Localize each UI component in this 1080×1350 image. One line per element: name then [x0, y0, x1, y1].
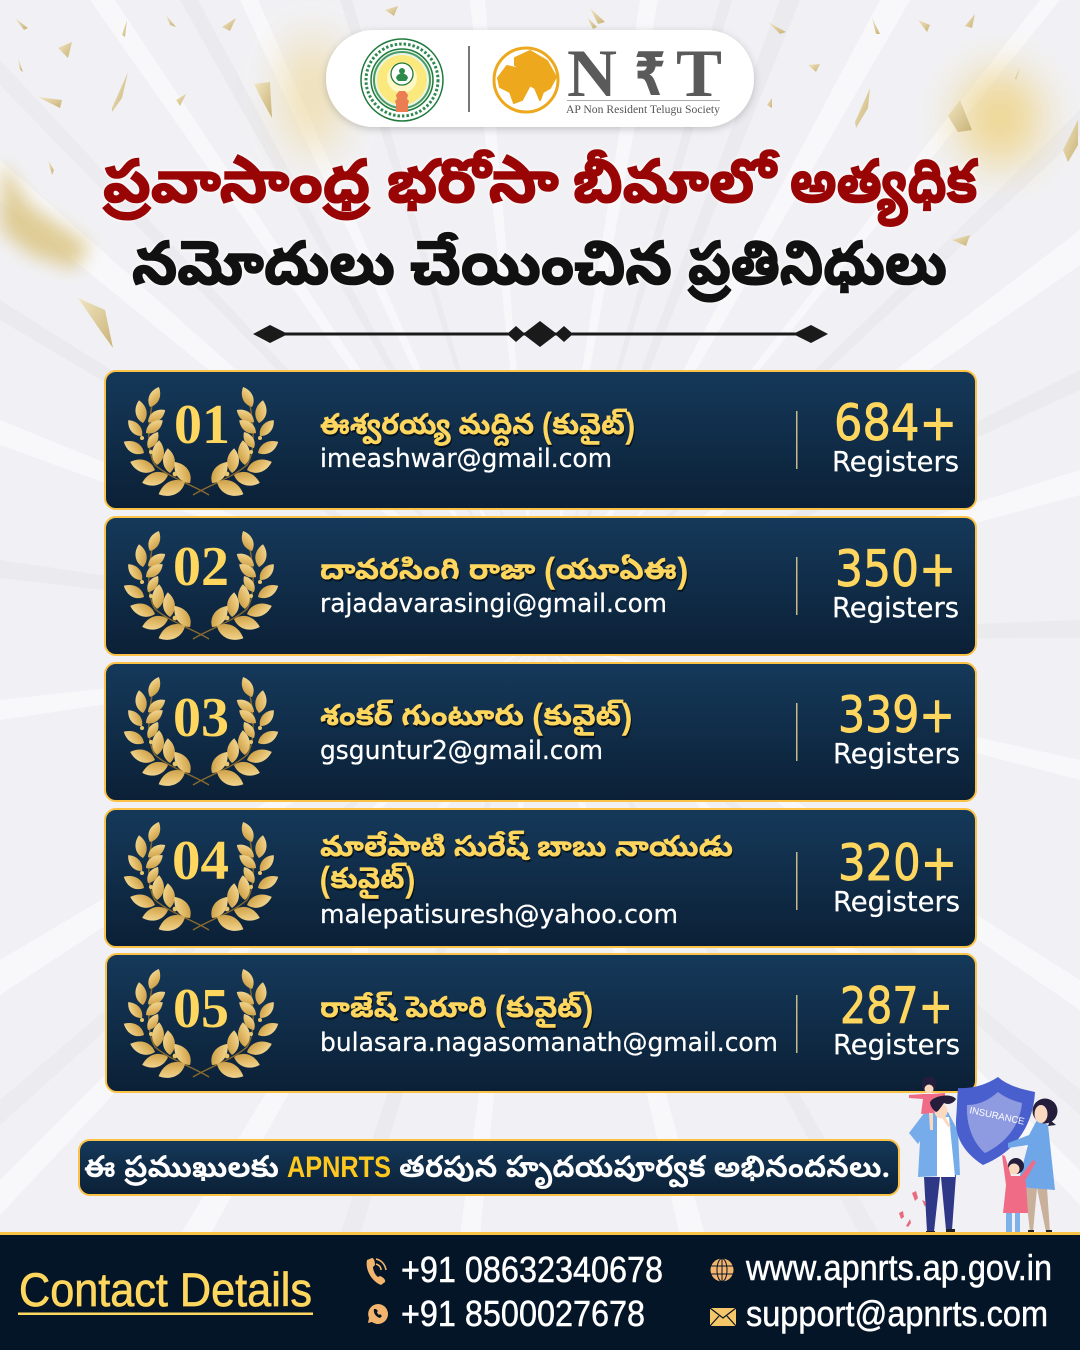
name 3: శంకర్ గుంటూరు (కువైట్) — [320, 699, 632, 740]
email 5: bulasara.nagasomanath@gmail.com — [320, 1028, 778, 1058]
email 2: rajadavarasingi@gmail.com — [320, 589, 667, 619]
icon: laurel 04 — [121, 820, 281, 936]
rank 04: 04 — [172, 830, 229, 892]
name 1: ఈశ్వరయ్య మద్దిన (కువైట్) — [320, 408, 635, 449]
banner text — [84, 1151, 890, 1192]
count 2: 350+ — [835, 540, 956, 598]
phone number: +91 08632340678 — [401, 1249, 663, 1290]
icon: phone — [367, 1258, 386, 1285]
title line 2: నమోదులు — [132, 232, 395, 313]
icon: globe — [494, 48, 558, 112]
name 4: మాలేపాటి సురేష్ బాబు నాయుడు — [320, 830, 733, 871]
rank 01: 01 — [174, 394, 230, 456]
shield — [956, 1077, 1035, 1165]
logo pill — [326, 30, 754, 127]
confetti pieces — [15, 6, 1078, 348]
whatsapp number: +91 8500027678 — [401, 1293, 645, 1334]
daughter — [1002, 1155, 1036, 1232]
icon: whatsapp — [368, 1304, 388, 1324]
NRT wordmark — [567, 35, 722, 111]
child on shoulders — [909, 1076, 956, 1130]
footer bar — [0, 1232, 1080, 1350]
NRT wordmark: ₹ — [634, 40, 666, 110]
rank 03: 03 — [173, 687, 229, 749]
rank 05: 05 — [173, 978, 229, 1040]
NRT wordmark: T — [676, 35, 722, 111]
title line 2: చేయించిన — [410, 232, 672, 313]
name 5: రాజేష్ పెరూరి (కువైట్) — [320, 991, 593, 1032]
rank 02: 02 — [173, 536, 229, 598]
title line 1: ప్రవాసాంధ్ర — [102, 150, 370, 231]
registers 1: Registers — [832, 445, 959, 478]
count 5: 287+ — [840, 977, 953, 1035]
ornament divider — [253, 321, 828, 347]
contact details heading: Contact Details — [19, 1263, 312, 1316]
icon: laurel 03 — [121, 675, 281, 791]
icon: laurel 01 — [121, 385, 281, 501]
icon: laurel 05 — [121, 967, 281, 1083]
card 1 — [105, 371, 976, 509]
name 4 second line: (కువైట్) — [320, 862, 415, 903]
icon: laurel 02 — [121, 529, 281, 645]
title line 1: బీమాలో — [573, 150, 779, 231]
mother — [1008, 1098, 1058, 1233]
title line 1: భరోసా — [387, 149, 559, 231]
card 5 — [106, 954, 976, 1092]
banner text: APNRTS — [287, 1151, 391, 1184]
illustration: family with insurance shield — [899, 1076, 1058, 1234]
title line 2 — [132, 232, 947, 313]
registers 5: Registers — [833, 1028, 960, 1061]
icon: globe small — [710, 1258, 734, 1282]
banner text: తరపున హృదయపూర్వక అభినందనలు. — [399, 1152, 890, 1192]
banner text: ఈ ప్రముఖులకు — [84, 1152, 279, 1192]
shield: INSURANCE — [968, 1105, 1025, 1128]
card 2 — [105, 517, 976, 655]
congratulations banner — [79, 1140, 899, 1195]
name 2: దావరసింగి రాజా (యూఏఈ) — [320, 554, 688, 594]
card 3 — [105, 663, 976, 801]
registers 4: Registers — [833, 885, 960, 918]
email 3: gsguntur2@gmail.com — [320, 736, 603, 766]
NRT tagline: AP Non Resident Telugu Society — [566, 104, 720, 116]
registers 3: Registers — [833, 737, 960, 770]
title line 1: అత్యధిక — [790, 150, 978, 231]
decorative ribbons — [899, 1191, 926, 1227]
father — [909, 1112, 960, 1234]
icon: mail — [710, 1308, 736, 1326]
card 4 — [105, 809, 976, 947]
title line 2: ప్రతినిధులు — [688, 232, 947, 313]
title line 1 — [102, 149, 978, 231]
count 1: 684+ — [834, 394, 957, 452]
registers 2: Registers — [832, 591, 959, 624]
NRT wordmark: N — [567, 35, 617, 111]
count 4: 320+ — [838, 834, 957, 892]
count 3: 339+ — [838, 686, 955, 744]
email 4: malepatisuresh@yahoo.com — [320, 900, 678, 930]
divider — [468, 46, 470, 112]
icon: Andhra Pradesh emblem — [361, 39, 443, 121]
email 1: imeashwar@gmail.com — [320, 444, 612, 474]
website: www.apnrts.ap.gov.in — [745, 1247, 1052, 1288]
email address: support@apnrts.com — [746, 1293, 1048, 1334]
gold blurred confetti glow — [0, 35, 1042, 270]
